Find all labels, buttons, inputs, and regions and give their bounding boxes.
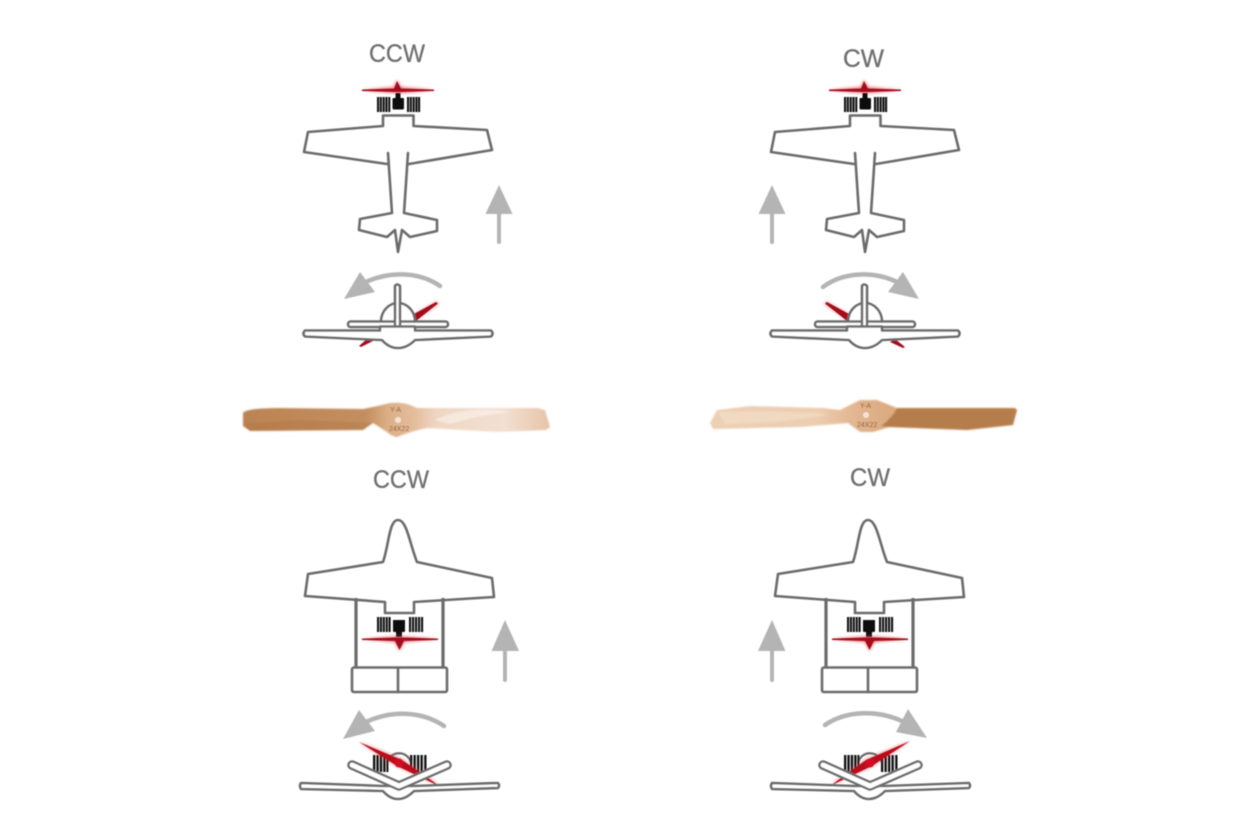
panel: top-left CCW tractor aircraft <box>304 40 512 348</box>
image: CW wooden propeller: 24X22 <box>857 422 877 429</box>
icon: aircraft top view with pusher motor <box>305 520 494 692</box>
panel: bottom-left CCW pusher aircraft <box>300 466 519 799</box>
icon: aircraft top view <box>304 116 492 252</box>
icon: front view with propeller, clockwise <box>770 284 960 348</box>
arrow: direction of flight <box>492 620 519 680</box>
panel: top-right CW tractor aircraft <box>758 45 960 348</box>
icon: aircraft top view with pusher motor, clockwise <box>775 520 964 692</box>
heading: CCW: CCW <box>373 466 429 494</box>
icon: propeller and motor top view, clockwise <box>829 80 901 112</box>
arrow: direction of flight <box>486 185 512 242</box>
heading: CW: CW <box>850 464 890 492</box>
arrow: clockwise rotation <box>825 709 927 738</box>
panel: bottom-right CW pusher aircraft <box>758 464 970 799</box>
arrow: counter-clockwise rotation <box>343 710 444 739</box>
image: CCW wooden propeller: Y-A <box>390 407 401 414</box>
arrow: clockwise rotation <box>823 272 919 299</box>
arrow: direction of flight, clockwise <box>758 620 786 680</box>
heading: CCW: CCW <box>369 40 425 68</box>
icon: front view with V-tail and propeller <box>300 742 499 799</box>
heading: CW: CW <box>843 45 884 73</box>
image: CCW wooden propeller <box>243 403 550 437</box>
icon: propeller and motor top view <box>362 80 434 112</box>
arrow: direction of flight, clockwise <box>758 185 786 242</box>
icon: front view with propeller <box>304 284 492 348</box>
image: CW wooden propeller <box>710 400 1017 432</box>
image: CCW wooden propeller: 24X22 <box>389 426 409 433</box>
icon: front view with V-tail and propeller, clockwise <box>771 741 970 799</box>
image: CW wooden propeller: Y-A <box>860 403 871 410</box>
arrow: counter-clockwise rotation <box>344 272 440 299</box>
icon: aircraft top view, clockwise <box>771 116 959 252</box>
